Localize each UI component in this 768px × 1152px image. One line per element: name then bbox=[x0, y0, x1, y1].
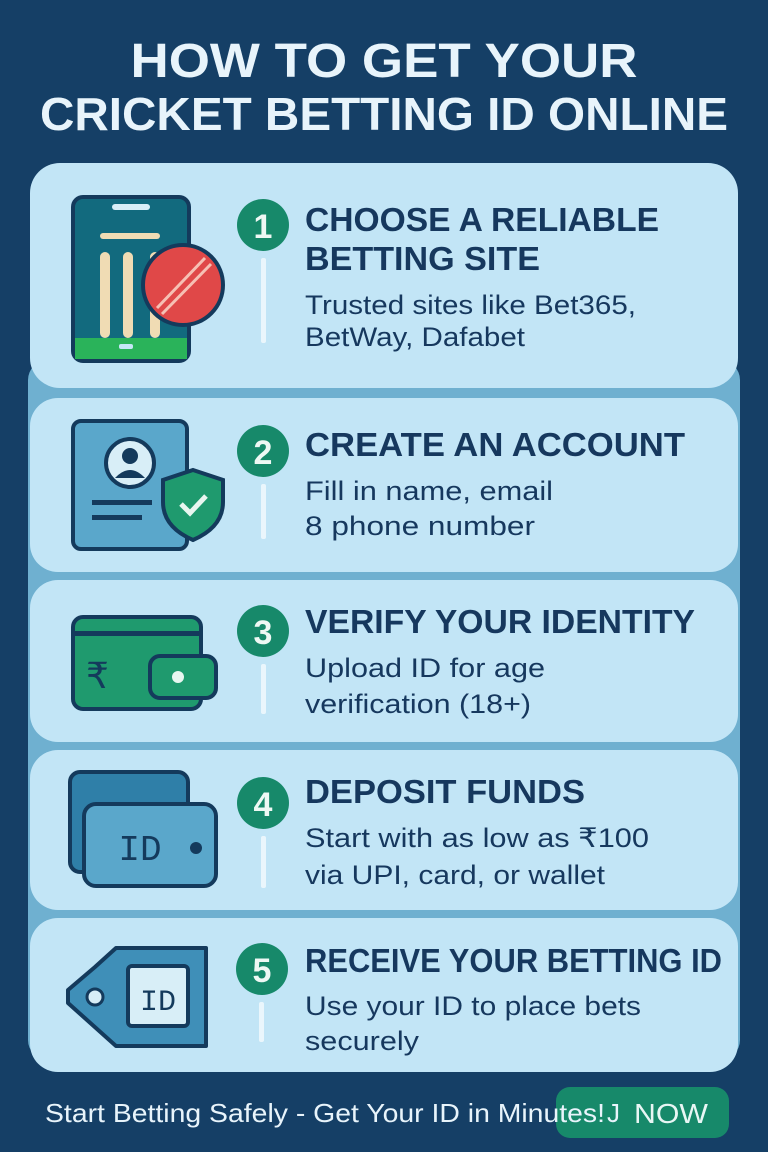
text 3 bbox=[305, 653, 545, 719]
heading 1 bbox=[305, 201, 659, 277]
heading 4: DEPOSIT FUNDS bbox=[305, 773, 585, 810]
icon: ID tag bbox=[68, 948, 206, 1046]
text 4: via UPI, card, or wallet bbox=[305, 860, 606, 890]
heading 1: CHOOSE A RELIABLE bbox=[305, 201, 659, 238]
number 4 bbox=[237, 777, 289, 888]
icon: ID card: ID bbox=[118, 830, 162, 871]
backing strip bbox=[28, 360, 740, 1060]
icon: wallet bbox=[73, 617, 216, 709]
text 5 bbox=[305, 991, 641, 1056]
heading 2: CREATE AN ACCOUNT bbox=[305, 426, 685, 463]
number 4: 4 bbox=[254, 786, 273, 824]
icon: ID tag: ID bbox=[140, 986, 176, 1020]
card 3 bbox=[30, 580, 738, 742]
heading 1: BETTING SITE bbox=[305, 240, 540, 277]
text 3: Upload ID for age bbox=[305, 653, 545, 683]
card 2 bbox=[30, 398, 738, 572]
text 2: 8 phone number bbox=[305, 511, 535, 541]
card 1 bbox=[30, 163, 738, 388]
text 5: Use your ID to place bets bbox=[305, 991, 641, 1021]
button: join now bbox=[556, 1087, 729, 1138]
heading 5: RECEIVE YOUR BETTING ID bbox=[305, 942, 722, 979]
number 1: 1 bbox=[254, 208, 272, 246]
text 1 bbox=[305, 290, 636, 352]
card 5 bbox=[30, 918, 738, 1072]
number 5: 5 bbox=[253, 952, 271, 990]
title: HOW TO GET YOUR bbox=[130, 35, 638, 88]
number 3 bbox=[237, 605, 289, 714]
text 2: Fill in name, email bbox=[305, 476, 553, 506]
icon: profile with shield bbox=[73, 421, 223, 549]
icon: phone with cricket bbox=[73, 197, 223, 361]
text 2 bbox=[305, 476, 553, 541]
number 2: 2 bbox=[254, 434, 272, 472]
number 5 bbox=[236, 943, 288, 1042]
text 5: securely bbox=[305, 1026, 420, 1056]
text 1: BetWay, Dafabet bbox=[305, 322, 526, 352]
title bbox=[40, 35, 728, 140]
footer text: J bbox=[607, 1098, 620, 1128]
title: CRICKET BETTING ID ONLINE bbox=[40, 88, 728, 140]
card 4 bbox=[30, 750, 738, 910]
text 3: verification (18+) bbox=[305, 689, 531, 719]
icon: wallet: ₹ bbox=[86, 655, 109, 696]
number 2 bbox=[237, 425, 289, 539]
heading 3: VERIFY YOUR IDENTITY bbox=[305, 603, 695, 640]
number 1 bbox=[237, 199, 289, 343]
button: join now: NOW bbox=[634, 1098, 709, 1129]
text 4 bbox=[305, 823, 649, 890]
text 1: Trusted sites like Bet365, bbox=[305, 290, 636, 320]
text 4: Start with as low as ₹100 bbox=[305, 823, 649, 853]
number 3: 3 bbox=[254, 614, 272, 652]
icon: ID card bbox=[70, 772, 216, 886]
footer text: Start Betting Safely - Get Your ID in Minutes! bbox=[45, 1098, 605, 1128]
